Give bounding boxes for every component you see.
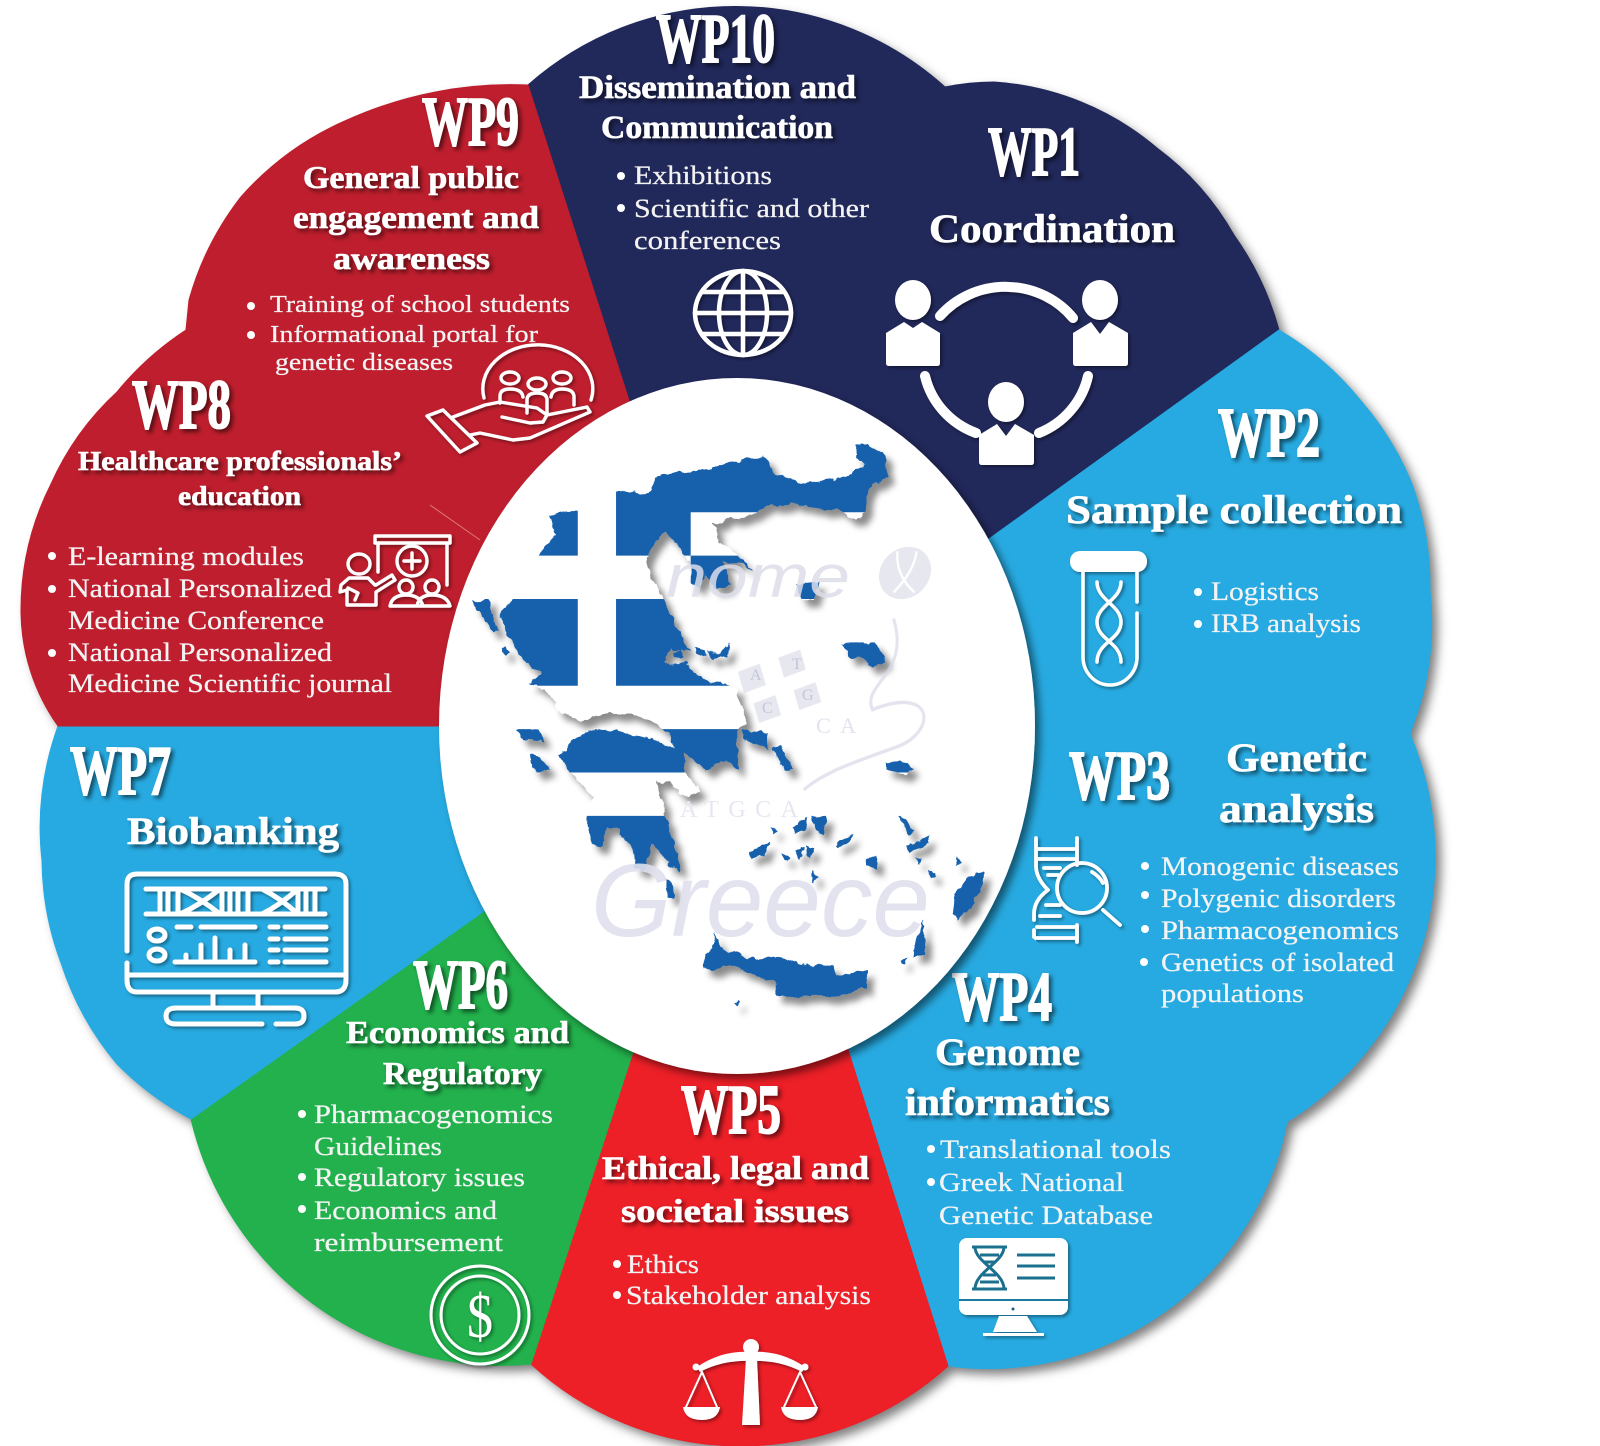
- WP8 heading: education: [178, 481, 301, 511]
- WP2 title: WP2: [1218, 395, 1320, 472]
- WP3 bullet list: Pharmacogenomics: [1161, 916, 1399, 945]
- WP9 heading: engagement and: [293, 199, 539, 235]
- WP9 bullet list: Informational portal for: [270, 322, 538, 348]
- WP6 bullet list: [298, 1100, 553, 1257]
- icon: monitor with DNA and charts: [127, 874, 346, 1024]
- WP3 bullet list: Monogenic diseases: [1161, 852, 1399, 881]
- WP5 bullet list: Stakeholder analysis: [626, 1281, 871, 1310]
- icon: dollar coin: [431, 1266, 529, 1364]
- WP4 title: WP4: [952, 959, 1052, 1036]
- WP3 heading: [1219, 735, 1374, 831]
- WP9 heading: awareness: [333, 240, 490, 276]
- panel: WP5 ethical, legal and societal issues: [531, 726, 948, 1446]
- WP6 bullet list: Pharmacogenomics: [314, 1100, 553, 1129]
- WP1 title: WP1: [988, 114, 1080, 191]
- WP3 heading: Genetic: [1226, 735, 1367, 780]
- panel: WP6 economics and regulatory: [191, 726, 737, 1365]
- WP6 bullet list: Regulatory issues: [314, 1163, 525, 1192]
- panel: WP7 biobanking: [40, 726, 737, 1119]
- watermark: sequence letters: ATGCA: [680, 797, 799, 823]
- WP2 heading: Sample collection: [1066, 487, 1402, 532]
- watermark: sequence letters: [680, 656, 856, 823]
- WP10 heading: Dissemination and: [579, 70, 856, 106]
- WP8 heading: [78, 446, 402, 511]
- panel: WP2 sample collection: [737, 330, 1432, 734]
- WP3 bullet list: Polygenic disorders: [1161, 884, 1396, 913]
- watermark: sequence letters: C: [762, 700, 773, 717]
- WP8 title: WP8: [132, 367, 231, 444]
- WP4 heading: [905, 1031, 1110, 1124]
- icon: teacher and audience: [340, 536, 450, 606]
- WP9 heading: General public: [303, 159, 519, 195]
- WP8 heading: Healthcare professionals’: [78, 446, 402, 476]
- WP8 bullet list: Medicine Scientific journal: [68, 669, 392, 698]
- WP5 title: WP5: [681, 1072, 781, 1149]
- WP3 bullet list: Genetics of isolated: [1161, 948, 1394, 977]
- watermark: sequence letters: C A: [816, 713, 856, 738]
- watermark: sequence letters: G: [802, 687, 814, 704]
- panel: WP4 genome informatics: [737, 726, 1287, 1369]
- WP6 panel shape: [191, 726, 737, 1365]
- WP8 panel shape: [21, 330, 737, 726]
- WP4 panel shape: [737, 726, 1287, 1369]
- WP3 bullet list: populations: [1161, 979, 1304, 1008]
- WP6 bullet list: Guidelines: [314, 1132, 442, 1161]
- WP9 bullet list: genetic diseases: [275, 350, 453, 376]
- WP4 heading: informatics: [905, 1081, 1110, 1124]
- icon: DNA with magnifier: [1034, 838, 1120, 942]
- WP8 bullet list: National Personalized: [68, 574, 332, 603]
- WP9 bullet list: Training of school students: [270, 292, 570, 318]
- WP4 bullet list: Genetic Database: [939, 1201, 1153, 1230]
- WP1 panel shape: [737, 82, 1279, 726]
- WP10 bullet list: Exhibitions: [634, 161, 772, 190]
- central white circle: [439, 378, 1035, 1074]
- WP8 bullet list: Medicine Conference: [68, 606, 324, 635]
- WP3 panel shape: [737, 726, 1435, 1122]
- WP6 heading: [346, 1014, 569, 1091]
- panel: WP1 coordination: [737, 82, 1279, 726]
- WP2 panel shape: [737, 330, 1432, 734]
- WP10 heading: [579, 70, 856, 146]
- WP3 bullet list: [1140, 852, 1399, 1008]
- WP9 heading: [293, 159, 539, 276]
- WP3 heading: analysis: [1219, 786, 1374, 831]
- watermark: sequence letters: T: [792, 656, 802, 673]
- WP5 bullet list: [613, 1250, 871, 1310]
- WP10 heading: Communication: [601, 110, 833, 146]
- panel: WP10 dissemination and communication: [528, 1, 945, 726]
- WP10 bullet list: Scientific and other: [634, 194, 869, 223]
- icon: dollar coin: $: [467, 1283, 493, 1351]
- WP6 bullet list: reimbursement: [314, 1228, 504, 1257]
- icon: test tube with DNA: [1070, 551, 1147, 685]
- WP7 panel shape: [40, 726, 737, 1119]
- icon: three people in a circle: [886, 280, 1128, 465]
- icon: globe: [695, 271, 791, 355]
- WP10 bullet list: [617, 161, 869, 255]
- WP8 bullet list: E-learning modules: [68, 542, 304, 571]
- panel: WP9 general public engagement and awareness: [186, 84, 737, 726]
- WP2 bullet list: Logistics: [1211, 577, 1319, 606]
- Greece flag map: [472, 444, 994, 1016]
- watermark: Genome of Greece logo: [738, 537, 939, 790]
- WP9 title: WP9: [422, 84, 519, 161]
- watermark: Greece: Greece: [591, 843, 930, 959]
- WP5 heading: [602, 1151, 869, 1230]
- WP6 heading: Economics and: [346, 1014, 569, 1050]
- WP6 title: WP6: [413, 947, 508, 1024]
- WP7 title: WP7: [70, 733, 171, 810]
- WP8 bullet list: [48, 542, 392, 698]
- WP5 heading: Ethical, legal and: [602, 1151, 869, 1187]
- icon: computer with DNA: [959, 1238, 1068, 1336]
- WP10 title: WP10: [656, 1, 775, 78]
- WP5 heading: societal issues: [621, 1194, 849, 1230]
- WP6 heading: Regulatory: [383, 1055, 542, 1091]
- WP6 bullet list: Economics and: [314, 1196, 497, 1225]
- icon: hand holding people: [427, 345, 593, 452]
- watermark: nome text: nome: [666, 543, 850, 610]
- WP8 bullet list: National Personalized: [68, 638, 332, 667]
- WP5 bullet list: Ethics: [627, 1250, 699, 1279]
- WP4 bullet list: [927, 1135, 1171, 1230]
- panel: WP3 genetic analysis: [737, 726, 1435, 1122]
- WP2 bullet list: [1194, 577, 1361, 638]
- WP4 heading: Genome: [935, 1031, 1080, 1074]
- WP7 heading: Biobanking: [127, 810, 340, 853]
- icon: balance scales: [683, 1339, 818, 1425]
- watermark: sequence letters: A: [750, 667, 762, 684]
- WP9 panel shape: [186, 85, 737, 726]
- WP1 heading: Coordination: [929, 206, 1175, 251]
- WP10 bullet list: conferences: [634, 226, 781, 255]
- faint seam between WP8 and WP9: [430, 505, 480, 540]
- WP4 bullet list: Translational tools: [940, 1135, 1171, 1164]
- WP4 bullet list: Greek National: [939, 1168, 1124, 1197]
- WP3 title: WP3: [1069, 738, 1170, 815]
- WP5 panel shape: [531, 726, 948, 1446]
- map land filled with the Greek flag: [472, 444, 994, 1016]
- WP10 panel shape: [528, 6, 945, 726]
- WP9 bullet list: [247, 292, 570, 376]
- WP2 bullet list: IRB analysis: [1211, 609, 1361, 638]
- panel: WP8 healthcare professionals education: [21, 330, 737, 726]
